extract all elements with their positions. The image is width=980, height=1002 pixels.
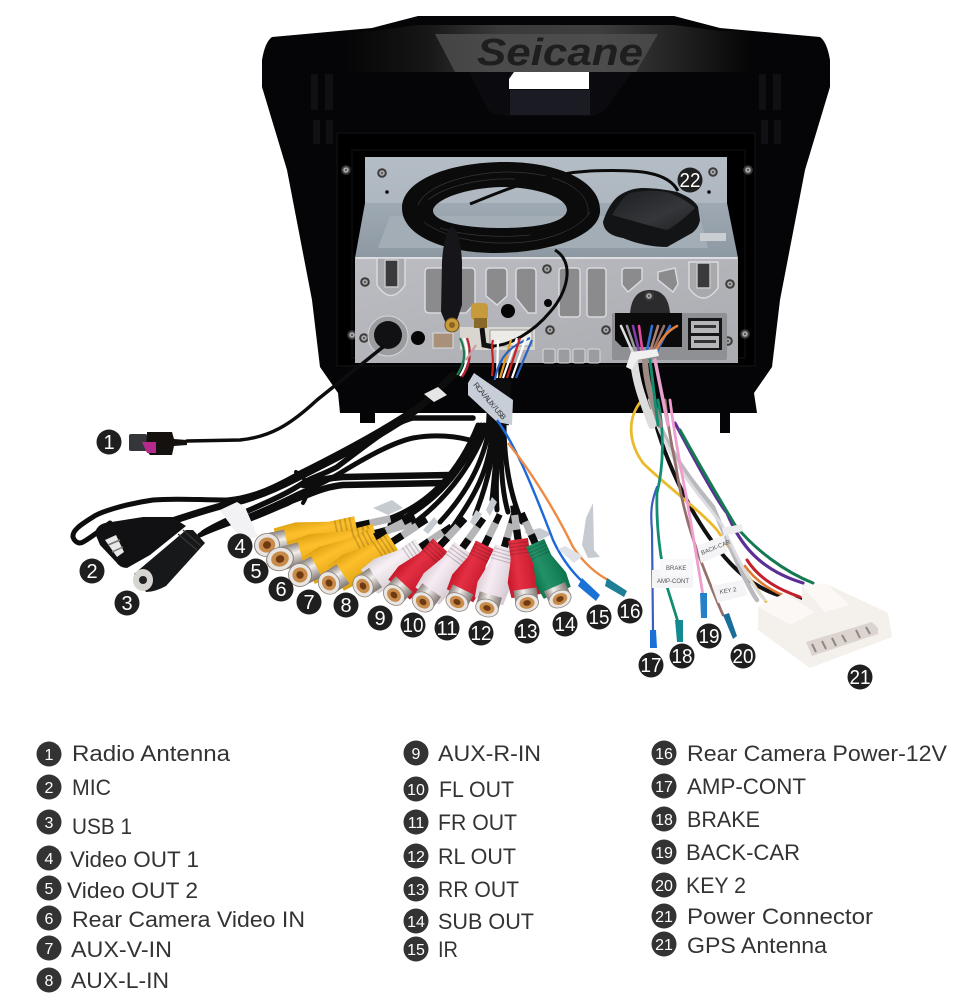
- badge 15: 15: [588, 607, 610, 629]
- legend: IR: 15: [407, 942, 425, 959]
- RCA plug 7: yellow: [311, 506, 436, 602]
- legend column 1: [36, 741, 305, 993]
- screen band: [345, 25, 750, 72]
- lead tips 17-20: [650, 593, 737, 648]
- badge 11: 11: [436, 618, 458, 640]
- RCA plug 10: white: [404, 509, 497, 619]
- legend: AUX-V-IN: [36, 936, 172, 962]
- small holes: [385, 190, 711, 345]
- badge 5: [244, 558, 268, 584]
- badge 17: 17: [640, 655, 662, 677]
- legend: AUX-V-IN: AUX-V-IN: [71, 937, 172, 962]
- legend: Video OUT 2: Video OUT 2: [67, 878, 198, 903]
- legend: BRAKE: BRAKE: [687, 807, 760, 832]
- legend: USB 1: 3: [45, 815, 54, 832]
- power connector 21: [758, 583, 892, 668]
- legend: IR: [404, 936, 458, 962]
- legend: Rear Camera Power-12V: Rear Camera Power-12V: [687, 741, 947, 766]
- legend: AUX-R-IN: [404, 740, 541, 766]
- legend: MIC: 2: [45, 780, 54, 797]
- power harness wires: [621, 326, 813, 632]
- badge 20: 20: [732, 646, 754, 668]
- legend: SUB OUT: 14: [407, 914, 425, 931]
- legend: KEY 2: [652, 872, 746, 898]
- legend: SUB OUT: SUB OUT: [438, 909, 534, 934]
- bundle tape label: [468, 373, 513, 425]
- legend: AUX-R-IN: AUX-R-IN: [438, 741, 541, 766]
- badge 1: 1: [103, 432, 115, 454]
- badge 3: 3: [121, 593, 133, 615]
- lead tags: [558, 503, 600, 563]
- harness wire labels: [652, 524, 747, 603]
- inner frame: [337, 133, 755, 366]
- head unit frame: [262, 16, 830, 433]
- badge 14: 14: [554, 614, 576, 636]
- badge 4: [228, 534, 252, 558]
- round antenna socket: [368, 316, 408, 356]
- badge 12: 12: [470, 623, 492, 645]
- legend: RR OUT: [404, 876, 519, 902]
- badge 2: 2: [86, 561, 98, 583]
- legend: FL OUT: FL OUT: [439, 777, 514, 802]
- side brackets: [377, 258, 718, 298]
- white cable label: [220, 502, 258, 540]
- legend: FR OUT: 11: [408, 815, 424, 832]
- GPS cable coil: [402, 162, 678, 346]
- vent slots: [425, 268, 678, 317]
- legend: Rear Camera Video IN: Rear Camera Video IN: [72, 907, 305, 932]
- badge 21: 21: [850, 667, 870, 689]
- RCA plug 13: red: [497, 503, 544, 614]
- badge 19: 19: [698, 626, 720, 648]
- legend: AUX-L-IN: [36, 968, 169, 993]
- legend: FL OUT: 10: [407, 782, 425, 799]
- RCA plug 6: yellow: [282, 502, 422, 595]
- badge 10: 10: [402, 615, 424, 637]
- badge 1: [96, 430, 122, 454]
- lower vents: [543, 349, 600, 363]
- center sockets: [433, 327, 535, 350]
- RCA plug 5: yellow: [263, 504, 430, 578]
- badge 16: 16: [620, 601, 640, 623]
- legend: Power Connector: Power Connector: [687, 904, 873, 929]
- frame screws: [341, 165, 753, 340]
- white slot: [509, 72, 589, 89]
- orange lead 16: [508, 443, 627, 597]
- badge 9: [368, 606, 392, 630]
- legend: RR OUT: 13: [407, 882, 425, 899]
- USB ports: [688, 318, 722, 350]
- legend: Rear Camera Power-12V: 16: [655, 746, 673, 763]
- legend: AUX-R-IN: 9: [412, 746, 421, 763]
- legend: USB 1: [36, 810, 132, 839]
- legend: AUX-V-IN: 7: [45, 941, 54, 958]
- RCA plug 14: green: [507, 506, 578, 613]
- legend: Video OUT 2: 5: [45, 881, 54, 898]
- GPS antenna: [603, 188, 700, 247]
- legend: Rear Camera Video IN: 6: [45, 911, 54, 928]
- loose signal wires: [457, 338, 532, 385]
- BACK-CAR label: BACK-CAR: [701, 539, 732, 557]
- legend: BRAKE: [652, 806, 760, 832]
- legend: USB 1: USB 1: [72, 814, 132, 839]
- badge 3: [114, 590, 140, 616]
- side clips: [311, 74, 781, 144]
- USB socket: [95, 517, 186, 568]
- badge 8: [334, 592, 358, 618]
- gold SMA connector: [471, 303, 494, 347]
- bundle tape label: RCA / AUX / USB: [471, 381, 508, 422]
- blue lead 15: [497, 420, 600, 601]
- badge 4: 4: [234, 536, 246, 558]
- legend: MIC: [36, 774, 111, 800]
- legend: Radio Antenna: Radio Antenna: [72, 741, 231, 766]
- cable tie: [296, 472, 307, 503]
- badge 18: 18: [672, 646, 692, 668]
- legend: MIC: MIC: [72, 775, 111, 800]
- legend: AMP-CONT: AMP-CONT: [687, 774, 806, 799]
- badge 13: 13: [516, 621, 538, 643]
- badge 6: 6: [275, 579, 287, 601]
- legend: Video OUT 1: Video OUT 1: [70, 847, 199, 872]
- silver wire tags: [373, 497, 552, 540]
- legend: RR OUT: RR OUT: [438, 877, 519, 902]
- radio antenna cable: [187, 347, 383, 441]
- legend: FR OUT: [404, 810, 517, 835]
- legend: Video OUT 1: 4: [45, 851, 54, 868]
- number badges on photo: [80, 168, 872, 690]
- badge 22: 22: [680, 170, 700, 192]
- wifi stick antenna: [441, 227, 462, 332]
- RCA and USB black cable bundle: [73, 347, 522, 543]
- legend: RL OUT: 12: [407, 849, 425, 866]
- AMP-CONT label: AMP-CONT: [657, 579, 689, 585]
- chassis screws: [359, 167, 735, 346]
- audio jack: [133, 530, 205, 592]
- logo: Seicane: Seicane: [477, 32, 643, 74]
- hood bracket: [469, 72, 632, 116]
- legend column 3: [652, 740, 947, 958]
- silver rear chassis: [355, 157, 738, 363]
- badge 5: 5: [250, 561, 262, 583]
- badge 8: 8: [340, 595, 352, 617]
- legend: BRAKE: 18: [655, 812, 673, 829]
- legend: KEY 2: KEY 2: [686, 873, 746, 898]
- legend: AMP-CONT: 17: [655, 779, 673, 796]
- RCA plug 8: white: [346, 513, 460, 605]
- bezel tab: [435, 34, 658, 72]
- legend: BACK-CAR: BACK-CAR: [686, 840, 800, 865]
- legend: Power Connector: 21: [655, 909, 673, 926]
- legend: FL OUT: [404, 776, 514, 802]
- badge 9: 9: [374, 608, 386, 630]
- legend: BACK-CAR: 19: [655, 845, 673, 862]
- legend column 2: [404, 740, 541, 962]
- wires in socket: [621, 326, 677, 355]
- RCA plug 4: yellow: [251, 500, 407, 564]
- legend: FR OUT: FR OUT: [438, 810, 517, 835]
- badge 2: [80, 558, 104, 584]
- legend: AUX-L-IN: AUX-L-IN: [71, 968, 169, 993]
- KEY 2 label: KEY 2: [719, 587, 738, 596]
- radio antenna plug 1: [129, 432, 187, 455]
- RCA plug 12: white: [469, 510, 530, 621]
- badge 7: 7: [303, 592, 315, 614]
- legend: AUX-L-IN: 8: [45, 973, 54, 990]
- socket panel: [612, 313, 727, 360]
- harness zip tie: [626, 349, 659, 370]
- cable zip tie near panel: [424, 387, 447, 402]
- legend: RL OUT: [404, 844, 516, 869]
- legend: IR: IR: [438, 937, 458, 962]
- RCA plug 11: red: [439, 507, 514, 617]
- legend: GPS Antenna: 21: [655, 937, 673, 954]
- legend: Radio Antenna: 1: [45, 747, 54, 764]
- legend: KEY 2: 20: [655, 878, 673, 895]
- RCA plug 9: red: [376, 508, 477, 613]
- badge 6: [268, 576, 294, 602]
- legend: GPS Antenna: GPS Antenna: [687, 933, 828, 958]
- badge 7: [296, 590, 322, 614]
- power socket: [630, 290, 670, 313]
- label sticker: [700, 233, 726, 241]
- legend: RL OUT: RL OUT: [438, 844, 516, 869]
- BRAKE label: BRAKE: [666, 566, 686, 572]
